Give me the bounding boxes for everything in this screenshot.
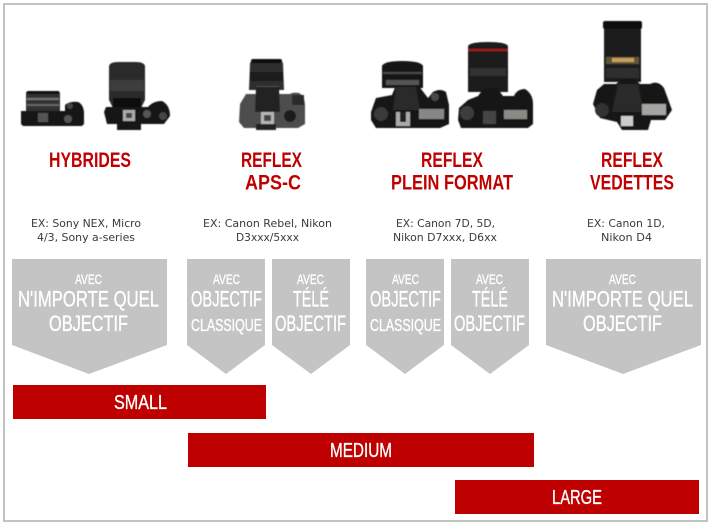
examples: reflex aps-c: D3xxx/5xxx	[236, 231, 299, 244]
examples: reflex vedettes: EX: Canon 1D,	[587, 217, 665, 230]
icon: full-frame reflex with short lens	[371, 61, 449, 128]
arrow panel: n'importe quel objectif: N'IMPORTE QUEL	[18, 286, 159, 312]
arrow panel: n'importe quel objectif: OBJECTIF	[49, 311, 128, 336]
arrow panel: télé objectif: AVEC	[297, 271, 324, 287]
title: reflex plein format: REFLEX	[421, 149, 483, 172]
column: hybrides	[12, 62, 170, 374]
arrow panel: n'importe quel objectif: AVEC	[609, 271, 636, 287]
arrow panel: objectif classique	[187, 259, 265, 374]
examples: reflex vedettes: Nikon D4	[601, 231, 652, 244]
title: reflex plein format	[391, 149, 513, 194]
title: reflex aps-c: REFLEX	[241, 149, 302, 172]
size bar: medium: MEDIUM	[330, 440, 392, 462]
title: reflex vedettes: REFLEX	[601, 149, 663, 172]
arrow panel: objectif classique	[366, 259, 444, 374]
arrow panel: télé objectif: OBJECTIF	[454, 311, 525, 336]
column: reflex plein format	[366, 42, 533, 374]
size bar: small	[13, 385, 266, 419]
size bar: small: SMALL	[114, 392, 167, 414]
column: reflex aps-c	[187, 59, 350, 374]
examples: hybrides: EX: Sony NEX, Micro	[31, 217, 141, 230]
arrow panel: télé objectif	[272, 259, 350, 374]
arrow panel: télé objectif: OBJECTIF	[275, 311, 346, 336]
icon: full-frame reflex with long lens	[458, 42, 533, 128]
arrow panel: n'importe quel objectif: AVEC	[75, 271, 102, 287]
arrow panel: objectif classique: CLASSIQUE	[370, 315, 441, 335]
arrow panel: n'importe quel objectif: OBJECTIF	[583, 311, 662, 336]
examples: reflex vedettes	[587, 217, 665, 244]
icon: compact mirrorless camera	[21, 91, 84, 126]
examples: reflex plein format: EX: Canon 7D, 5D,	[396, 217, 495, 230]
title: hybrides: HYBRIDES	[49, 149, 131, 172]
examples: reflex aps-c	[203, 217, 332, 244]
arrow panel: télé objectif: AVEC	[476, 271, 503, 287]
size bar: large: LARGE	[552, 487, 602, 509]
icon: aps-c reflex camera	[239, 59, 305, 130]
column: reflex vedettes	[546, 21, 701, 374]
size bar: medium	[188, 433, 534, 467]
examples: reflex plein format: Nikon D7xxx, D6xx	[393, 231, 497, 244]
size bar: large	[455, 480, 699, 514]
arrow panel: n'importe quel objectif	[546, 259, 701, 374]
title: reflex aps-c	[241, 149, 302, 194]
arrow panel: objectif classique: AVEC	[213, 271, 240, 287]
arrow panel: télé objectif: TÉLÉ	[293, 286, 329, 312]
arrow panel: n'importe quel objectif	[12, 259, 167, 374]
examples: reflex aps-c: EX: Canon Rebel, Nikon	[203, 217, 332, 230]
arrow panel: objectif classique: OBJECTIF	[191, 286, 262, 312]
arrow panel: objectif classique: OBJECTIF	[370, 286, 441, 312]
title: reflex plein format: PLEIN FORMAT	[391, 172, 513, 194]
arrow panel: télé objectif: TÉLÉ	[472, 286, 508, 312]
icon: professional reflex with telephoto lens	[593, 21, 672, 130]
title: reflex aps-c: APS-C	[245, 172, 301, 194]
arrow panel: objectif classique: CLASSIQUE	[191, 315, 262, 335]
icon: mirrorless camera with zoom lens	[104, 62, 170, 130]
examples: reflex plein format	[393, 217, 497, 244]
title: reflex vedettes	[590, 149, 674, 194]
arrow panel: télé objectif	[451, 259, 529, 374]
title: reflex vedettes: VEDETTES	[590, 172, 674, 194]
examples: hybrides	[31, 217, 141, 244]
arrow panel: objectif classique: AVEC	[392, 271, 419, 287]
examples: hybrides: 4/3, Sony a-series	[37, 231, 135, 244]
